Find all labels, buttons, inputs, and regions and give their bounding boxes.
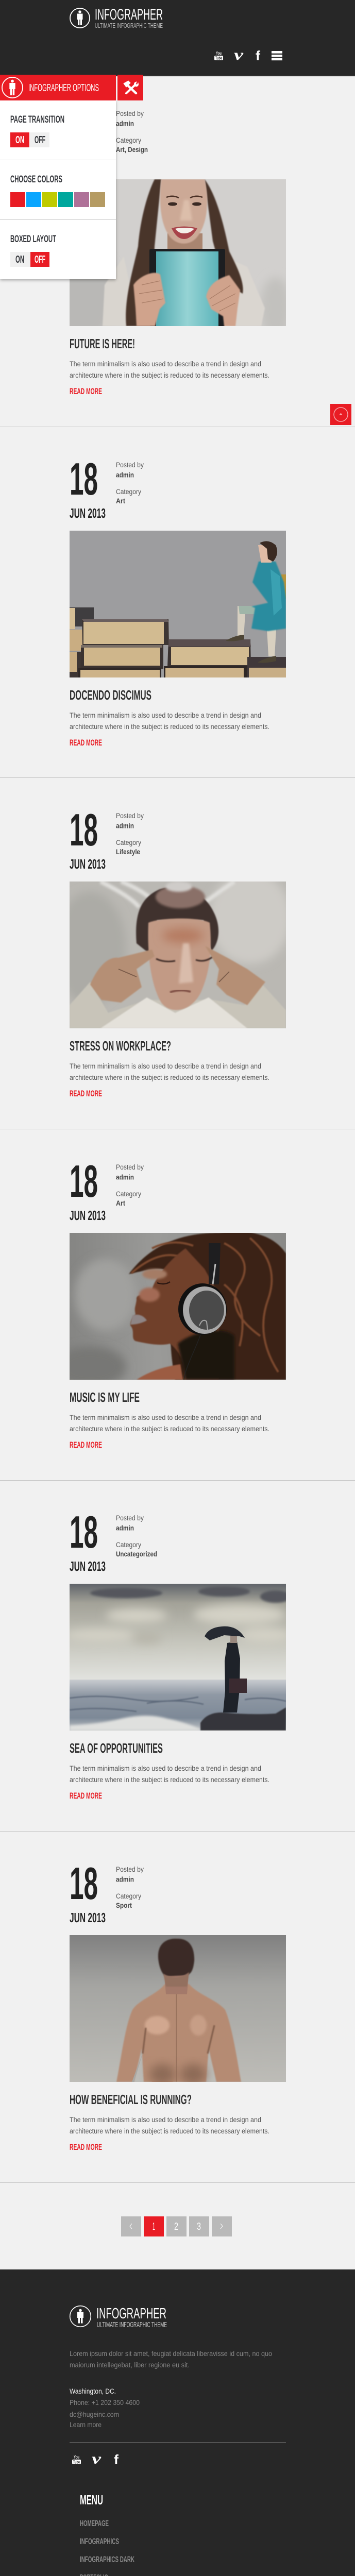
footer menu: HOMEPAGE: [80, 2519, 109, 2528]
icon: youtube: You: [216, 51, 222, 56]
photo: woman with headphones: [70, 1233, 286, 1380]
photo: girl climbing books: [70, 531, 286, 677]
footer menu: [80, 2492, 151, 2576]
photo: stressed man: [70, 882, 286, 1028]
page 1 active: [144, 2216, 164, 2236]
post meta: Category: [116, 137, 141, 144]
post date: 18: [70, 102, 98, 153]
post date: [70, 102, 106, 170]
arrow: next page: [212, 2216, 232, 2236]
post meta: Posted by: [116, 461, 144, 469]
post meta: [116, 1866, 144, 1909]
logo tagline: ULTIMATE INFOGRAPHIC THEME: [95, 22, 163, 29]
post excerpt: architecture where in the subject is reduced to its necessary elements.: [70, 371, 269, 379]
option: boxed layout: BOXED LAYOUT: [10, 234, 56, 245]
post 4: [0, 1156, 355, 1481]
option: choose colors: CHOOSE COLORS: [10, 174, 62, 185]
pagination: [121, 2216, 232, 2236]
post meta: Lifestyle: [116, 848, 140, 856]
page 2: 2: [174, 2221, 178, 2232]
post excerpt: The term minimalism is also used to describe a trend in design and: [70, 2116, 261, 2124]
post excerpt: [70, 1765, 269, 1784]
post meta: Posted by: [116, 1866, 144, 1873]
option: choose colors: [10, 174, 105, 207]
read more link: READ MORE: [70, 2142, 102, 2152]
post excerpt: The term minimalism is also used to describe a trend in design and: [70, 1414, 261, 1421]
post excerpt: [70, 360, 269, 379]
post meta: admin: [116, 120, 134, 128]
footer: [0, 2269, 355, 2576]
post date: 18: [70, 1858, 98, 1909]
post 6: [0, 1858, 355, 2183]
post date: [70, 1506, 106, 1574]
post meta: Category: [116, 839, 141, 846]
option: boxed layout: OFF: [35, 254, 45, 265]
post meta: Art: [116, 1199, 125, 1207]
post meta: Posted by: [116, 110, 144, 117]
post title: DOCENDO DISCIMUS: [70, 687, 151, 703]
post meta: Category: [116, 488, 141, 496]
options panel: [0, 75, 143, 279]
post excerpt: [70, 1062, 269, 1081]
post meta: [116, 812, 144, 856]
footer social icons: [72, 2450, 119, 2467]
post meta: [116, 1163, 144, 1207]
footer contact: [70, 2387, 140, 2429]
post 1: [0, 102, 355, 427]
post meta: admin: [116, 1174, 134, 1181]
footer logo: INFOGRAPHER: [96, 2306, 166, 2322]
post 5: [0, 1506, 355, 1832]
post date: 18: [70, 1156, 98, 1207]
footer menu: MENU: [80, 2492, 103, 2507]
footer menu: INFOGRAPHICS: [80, 2537, 119, 2546]
read more link: READ MORE: [70, 738, 102, 748]
post excerpt: [70, 1414, 269, 1433]
read more link: READ MORE: [70, 386, 102, 396]
footer contact: Learn more: [70, 2421, 102, 2429]
post meta: Category: [116, 1190, 141, 1198]
photo: businessman on rock at sea: [70, 1584, 286, 1731]
post excerpt: The term minimalism is also used to describe a trend in design and: [70, 711, 261, 719]
footer social icons: Tube: [73, 2460, 80, 2465]
post date: JUN 2013: [70, 505, 106, 521]
post title: SEA OF OPPORTUNITIES: [70, 1740, 163, 1756]
post meta: Art, Design: [116, 146, 148, 154]
option: page transition: ON: [15, 134, 24, 146]
post meta: Category: [116, 1541, 141, 1549]
post title: HOW BENEFICIAL IS RUNNING?: [70, 2092, 192, 2107]
post date: [70, 804, 106, 872]
post meta: Uncategorized: [116, 1550, 157, 1558]
back to top button: [330, 404, 351, 425]
page 1 active: 1: [153, 2221, 155, 2232]
footer contact: Phone: +1 202 350 4600: [70, 2399, 140, 2406]
post meta: Category: [116, 1892, 141, 1900]
page 2: [166, 2216, 187, 2236]
post date: JUN 2013: [70, 1910, 106, 1925]
read more link: READ MORE: [70, 1791, 102, 1801]
post meta: admin: [116, 822, 134, 829]
post excerpt: [70, 2116, 269, 2135]
post excerpt: The term minimalism is also used to describe a trend in design and: [70, 360, 261, 368]
footer social icons: f: [114, 2452, 119, 2467]
icon: facebook: f: [256, 48, 260, 63]
post excerpt: The term minimalism is also used to describe a trend in design and: [70, 1062, 261, 1070]
panel header: [0, 75, 116, 100]
footer contact: Washington, DC.: [70, 2387, 116, 2395]
post meta: admin: [116, 1524, 134, 1532]
option: page transition: OFF: [35, 134, 45, 146]
post date: JUN 2013: [70, 154, 106, 170]
post meta: Posted by: [116, 812, 144, 820]
post title: STRESS ON WORKPLACE?: [70, 1038, 171, 1054]
icon: logo person: [70, 8, 90, 28]
post title: MUSIC IS MY LIFE: [70, 1389, 140, 1405]
option: page transition: [10, 114, 64, 147]
footer about text: [70, 2350, 272, 2369]
post excerpt: architecture where in the subject is reduced to its necessary elements.: [70, 723, 269, 731]
footer contact: dc@hugeinc.com: [70, 2411, 119, 2418]
page 3: 3: [197, 2221, 201, 2232]
icon: youtube: [214, 51, 223, 61]
post date: 18: [70, 453, 98, 504]
option: boxed layout: [10, 234, 56, 267]
icon: menu burger: [272, 51, 282, 60]
post meta: [116, 461, 144, 505]
page 3: [189, 2216, 209, 2236]
post excerpt: architecture where in the subject is reduced to its necessary elements.: [70, 1425, 269, 1433]
photo: woman holding tablet: [70, 179, 286, 326]
post excerpt: The term minimalism is also used to describe a trend in design and: [70, 1765, 261, 1772]
post date: [70, 1156, 106, 1223]
header bar: [0, 0, 355, 77]
option: page transition: PAGE TRANSITION: [10, 114, 64, 125]
footer menu: INFOGRAPHICS DARK: [80, 2555, 134, 2564]
footer social icons: v: [92, 2450, 102, 2467]
post date: JUN 2013: [70, 1558, 106, 1574]
post title: FUTURE IS HERE!: [70, 336, 135, 351]
photo: man's back: [70, 1935, 286, 2082]
footer logo: [70, 2306, 167, 2329]
post excerpt: [70, 711, 269, 731]
post meta: [116, 110, 148, 154]
panel header: INFOGRAPHER OPTIONS: [28, 82, 99, 94]
logo title: INFOGRAPHER: [95, 6, 163, 23]
footer about text: maiorum intellegebat, liber regione eu sit.: [70, 2361, 190, 2369]
post date: [70, 1858, 106, 1925]
post 2: [0, 453, 355, 778]
read more link: READ MORE: [70, 1440, 102, 1450]
arrow: previous page: [121, 2216, 141, 2236]
post excerpt: architecture where in the subject is reduced to its necessary elements.: [70, 2127, 269, 2135]
post meta: [116, 1514, 157, 1558]
post meta: Art: [116, 497, 125, 505]
post date: 18: [70, 804, 98, 855]
post date: JUN 2013: [70, 856, 106, 872]
post excerpt: architecture where in the subject is reduced to its necessary elements.: [70, 1776, 269, 1784]
post excerpt: architecture where in the subject is reduced to its necessary elements.: [70, 1074, 269, 1081]
post date: 18: [70, 1506, 98, 1557]
post meta: admin: [116, 1875, 134, 1884]
post date: JUN 2013: [70, 1208, 106, 1223]
post 3: [0, 804, 355, 1129]
post meta: admin: [116, 471, 134, 479]
post meta: Posted by: [116, 1514, 144, 1522]
icon: tools tab: [117, 75, 143, 100]
read more link: READ MORE: [70, 1089, 102, 1098]
footer logo: ULTIMATE INFOGRAPHIC THEME: [97, 2320, 167, 2329]
footer about text: Lorem ipsum dolor sit amet, feugiat delicata liberavisse id cum, no quo: [70, 2350, 272, 2358]
icon: youtube: Tube: [215, 56, 222, 61]
icon: vimeo: v: [234, 46, 244, 63]
option: boxed layout: ON: [15, 254, 24, 265]
post meta: Posted by: [116, 1163, 144, 1171]
footer social icons: You: [74, 2455, 79, 2460]
post date: [70, 453, 106, 521]
post meta: Sport: [116, 1902, 132, 1909]
